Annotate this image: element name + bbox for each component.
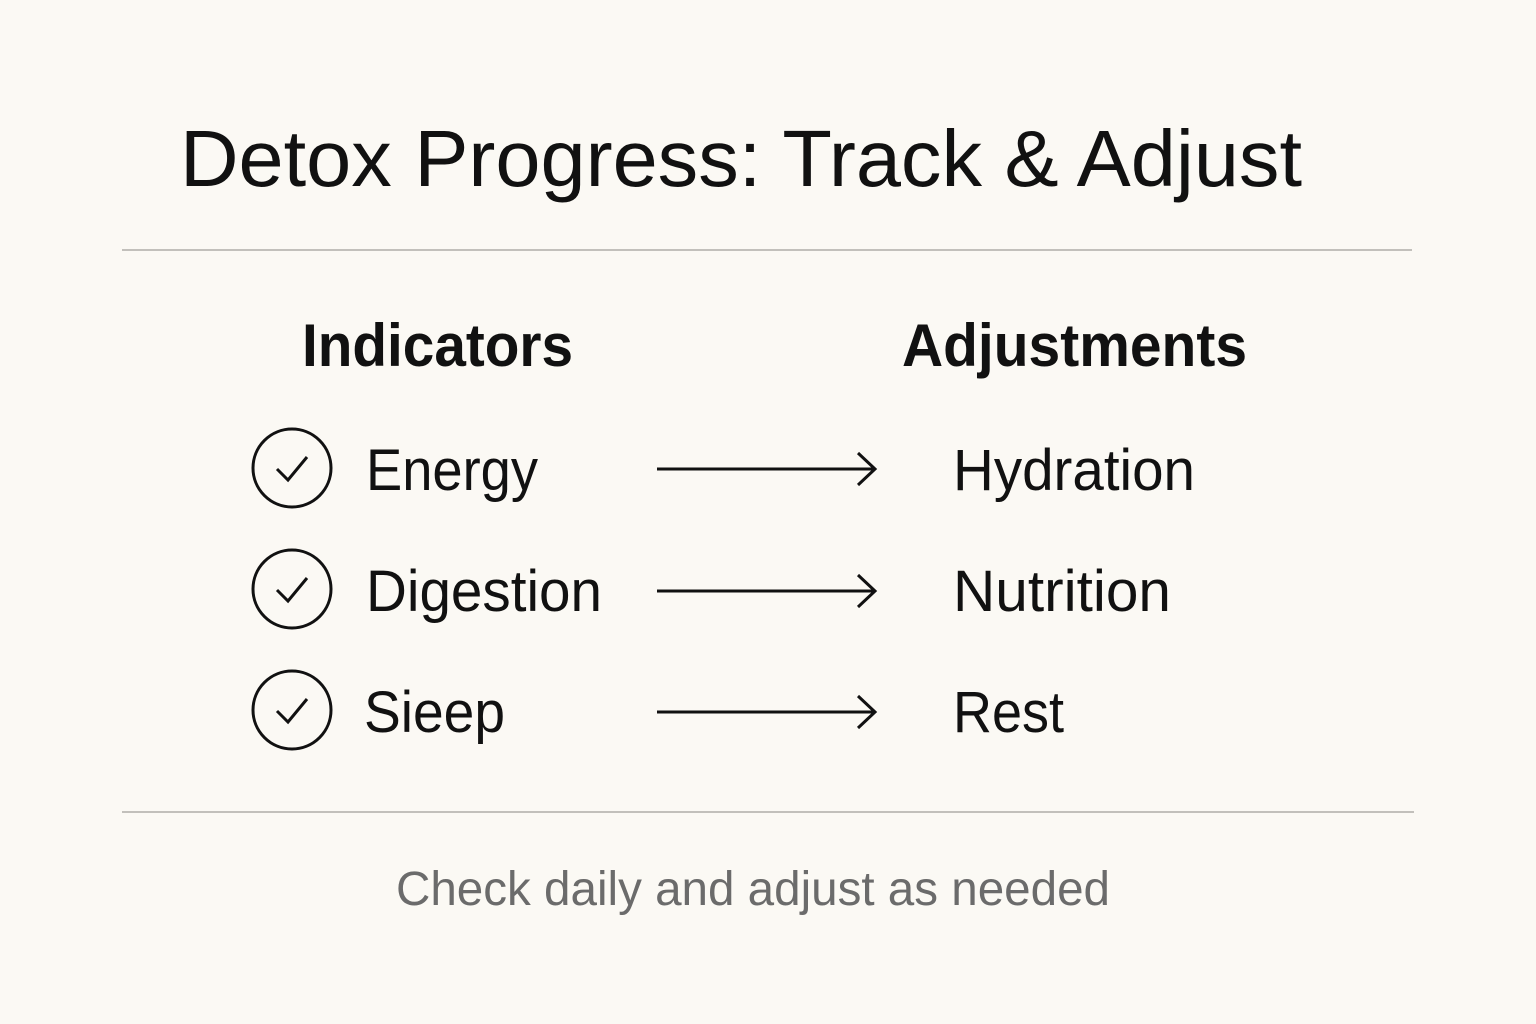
heading: adjustments: Adjustments (902, 312, 1247, 379)
arrow: energy to hydration (657, 453, 875, 485)
arrow: sleep to rest (657, 696, 875, 728)
label: sleep: Sieep (364, 680, 505, 745)
label: hydration: Hydration (953, 438, 1195, 503)
row: sleep (253, 671, 1064, 749)
icon: check circle energy (253, 429, 331, 507)
label: nutrition: Nutrition (953, 559, 1171, 624)
arrow: digestion to nutrition (657, 575, 875, 607)
heading: indicators: Indicators (302, 312, 573, 379)
label: energy: Energy (366, 438, 538, 503)
label: digestion: Digestion (366, 559, 602, 624)
icon: check circle digestion (253, 550, 331, 628)
title: Detox Progress: Track & Adjust (180, 114, 1302, 203)
icon: check circle sleep (253, 671, 331, 749)
label: rest: Rest (953, 680, 1064, 745)
footer note: Check daily and adjust as needed (396, 863, 1110, 916)
row: energy (253, 429, 1195, 507)
row: digestion (253, 550, 1171, 628)
